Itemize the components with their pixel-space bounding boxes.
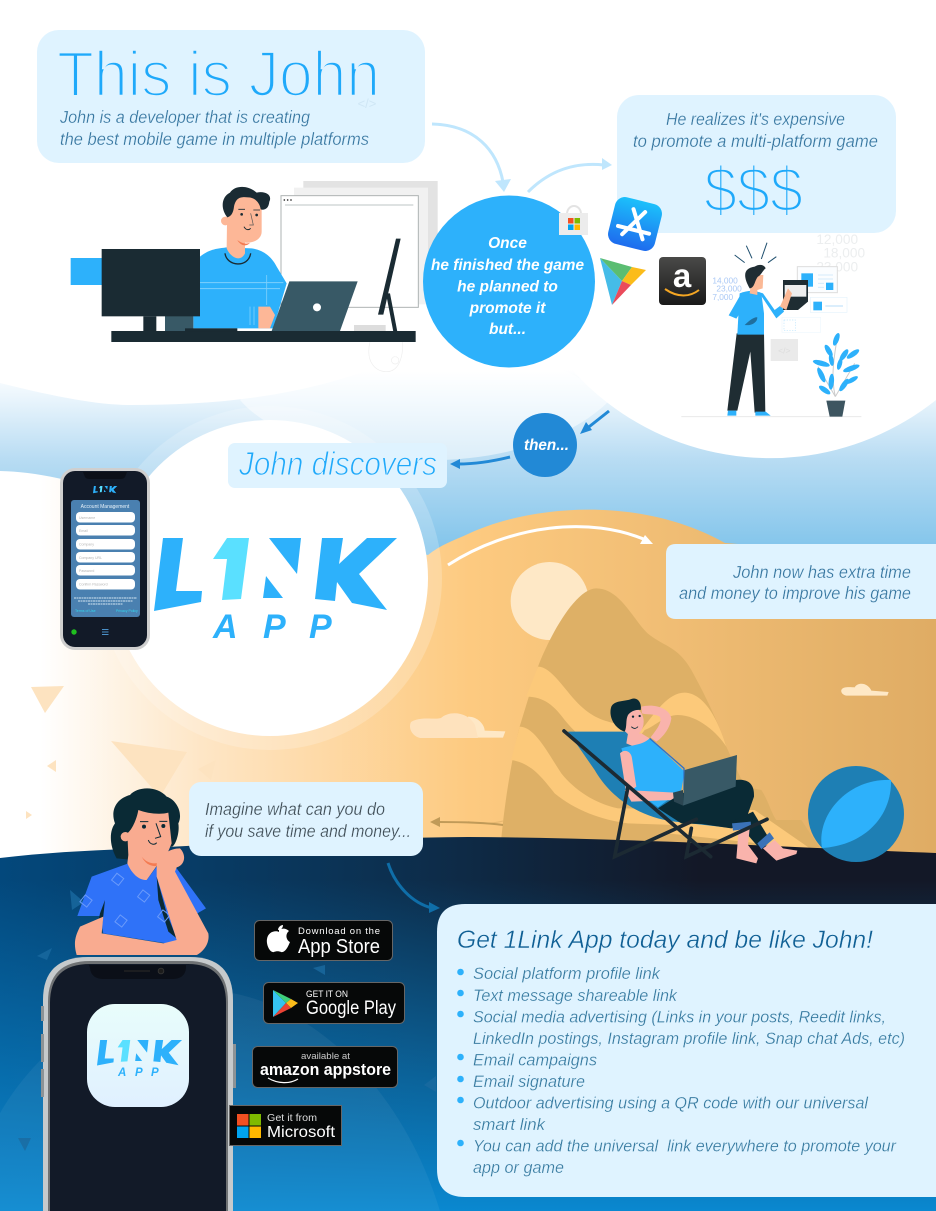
badge: Amazon appstore: amazon appstore: [260, 1060, 391, 1079]
panel: imagine: if you save time and money...: [205, 821, 411, 841]
illustration: beach mountain: [468, 562, 889, 850]
badge: App Store: [254, 920, 392, 960]
circle: once he finished the game: he finished the game: [431, 257, 584, 274]
icon: Google Play: [600, 258, 646, 305]
phone: account management screen: Privacy Policy: [116, 609, 138, 613]
circle: once he finished the game: but...: [489, 321, 526, 338]
illustration: John looking at analytics: 12,000: [816, 232, 859, 247]
expensive text: [633, 109, 878, 151]
icon: Amazon: a: [673, 257, 692, 294]
illustration: John looking at analytics: </>: [778, 345, 791, 355]
circle: once he finished the game: Once: [488, 235, 527, 252]
illustration: John looking at analytics: 14,000: [712, 275, 738, 285]
bullet list: app or game: [473, 1158, 564, 1177]
badge: App Store: App Store: [298, 936, 380, 958]
cloud: left: [410, 713, 478, 738]
logo: 1Link App: APP: [212, 608, 332, 646]
panel heading: Get 1Link App today and be like John!: [457, 926, 873, 954]
app icon: APP: [117, 1067, 159, 1079]
phone: account management screen: Terms of Use: [75, 609, 96, 613]
bullet list: Outdoor advertising using a QR code with our universal: [473, 1094, 869, 1112]
arrow: circle to expensive: [528, 158, 612, 192]
logo: 1Link App: [154, 538, 397, 646]
expensive text: He realizes it's expensive: [666, 109, 845, 129]
badge: Google Play: Google Play: [306, 998, 396, 1019]
circle: once he finished the game: he planned to: [457, 278, 558, 296]
expensive text: to promote a multi-platform game: [633, 131, 878, 151]
panel: Get 1Link App today: [437, 904, 936, 1197]
bullet list: Social platform profile link: [473, 964, 661, 983]
bullet list: You can add the universal link everywhere to promote your: [473, 1136, 897, 1156]
phone: account management screen: [60, 468, 150, 650]
panel: John now has extra time: John now has extra time: [732, 562, 911, 582]
badge: Amazon appstore: [252, 1046, 398, 1088]
badge: App Store: Download on the: [298, 926, 380, 937]
arrow: intro to circle: [432, 124, 511, 192]
circle: then: then...: [524, 437, 569, 454]
circle: once he finished the game: [423, 196, 595, 368]
phone: account management screen: Password: [79, 569, 94, 573]
illustration: John looking at analytics: 23,000: [716, 284, 742, 294]
icon: beach ball: [808, 766, 904, 862]
illustration: John at his desk: [71, 181, 438, 372]
icon: App Store: [606, 195, 664, 253]
icon: Amazon: [659, 257, 706, 305]
arrow: then to John discovers: [450, 457, 510, 469]
bullet list: [457, 964, 905, 1177]
intro text: John is a developer that is creating: [59, 107, 310, 127]
illustration: John looking at analytics: [681, 232, 866, 417]
intro text: the best mobile game in multiple platforms: [60, 129, 369, 149]
bullet list: Email signature: [473, 1072, 585, 1091]
label: John discovers: John discovers: [238, 445, 437, 482]
arrow: logo to extra time: [448, 527, 653, 565]
illustration: John thinking above phone: [75, 788, 209, 955]
phone: account management screen: Username: [79, 516, 95, 520]
illustration: John looking at analytics: 7,000: [712, 292, 734, 302]
dollar signs: $$$: [704, 154, 803, 226]
badge: Amazon appstore: available at: [301, 1051, 350, 1062]
arrow: imagine to panel: [388, 863, 440, 913]
bullet list: Email campaigns: [473, 1050, 597, 1070]
panel: John now has extra time: [666, 544, 936, 619]
intro text: [59, 107, 369, 149]
illustration: John looking at analytics: 23,000: [816, 260, 859, 275]
panel: imagine: [189, 782, 423, 856]
faint code mark: </>: [358, 96, 376, 111]
arrow: into then circle: [580, 411, 609, 434]
circle: then: [513, 413, 577, 477]
bullet list: Social media advertising (Links in your posts, Reedit links,: [473, 1008, 886, 1026]
dark ground and lower background: [0, 837, 936, 1211]
panel: John now has extra time: and money to improve his game: [679, 583, 911, 603]
title: This is John: [57, 38, 380, 110]
illustration: John relaxing on beach chair: [564, 699, 797, 863]
badge: Microsoft: Microsoft: [267, 1124, 336, 1141]
badge: Microsoft: Get it from: [267, 1112, 317, 1124]
panel: imagine: Imagine what can you do: [205, 799, 385, 819]
phone: account management screen: Confirm Password: [79, 582, 108, 586]
bullet list: Text message shareable link: [473, 986, 678, 1005]
badge: Google Play: [264, 982, 404, 1024]
bullet list: smart link: [473, 1115, 546, 1134]
circle: once he finished the game: promote it: [469, 300, 546, 317]
heading panel: This is John: [37, 30, 425, 163]
app icon: [87, 1004, 189, 1107]
badge: Google Play: GET IT ON: [306, 989, 348, 999]
icon: Microsoft store bag: [559, 206, 588, 235]
phone: app icon screen: [41, 957, 236, 1211]
phone: account management screen: Email: [79, 529, 88, 533]
phone: account management screen: Account Management: [81, 504, 130, 510]
phone: account management screen: Company: [79, 542, 94, 546]
illustration: John looking at analytics: 18,000: [823, 246, 866, 261]
arrow: beach to imagine: [430, 817, 503, 827]
panel: expensive to promote: [617, 95, 896, 233]
badge: Microsoft: [230, 1106, 342, 1146]
bullet list: LinkedIn postings, Instagram profile link, Snap chat Ads, etc): [473, 1029, 905, 1048]
phone: account management screen: Company URL: [79, 556, 102, 560]
